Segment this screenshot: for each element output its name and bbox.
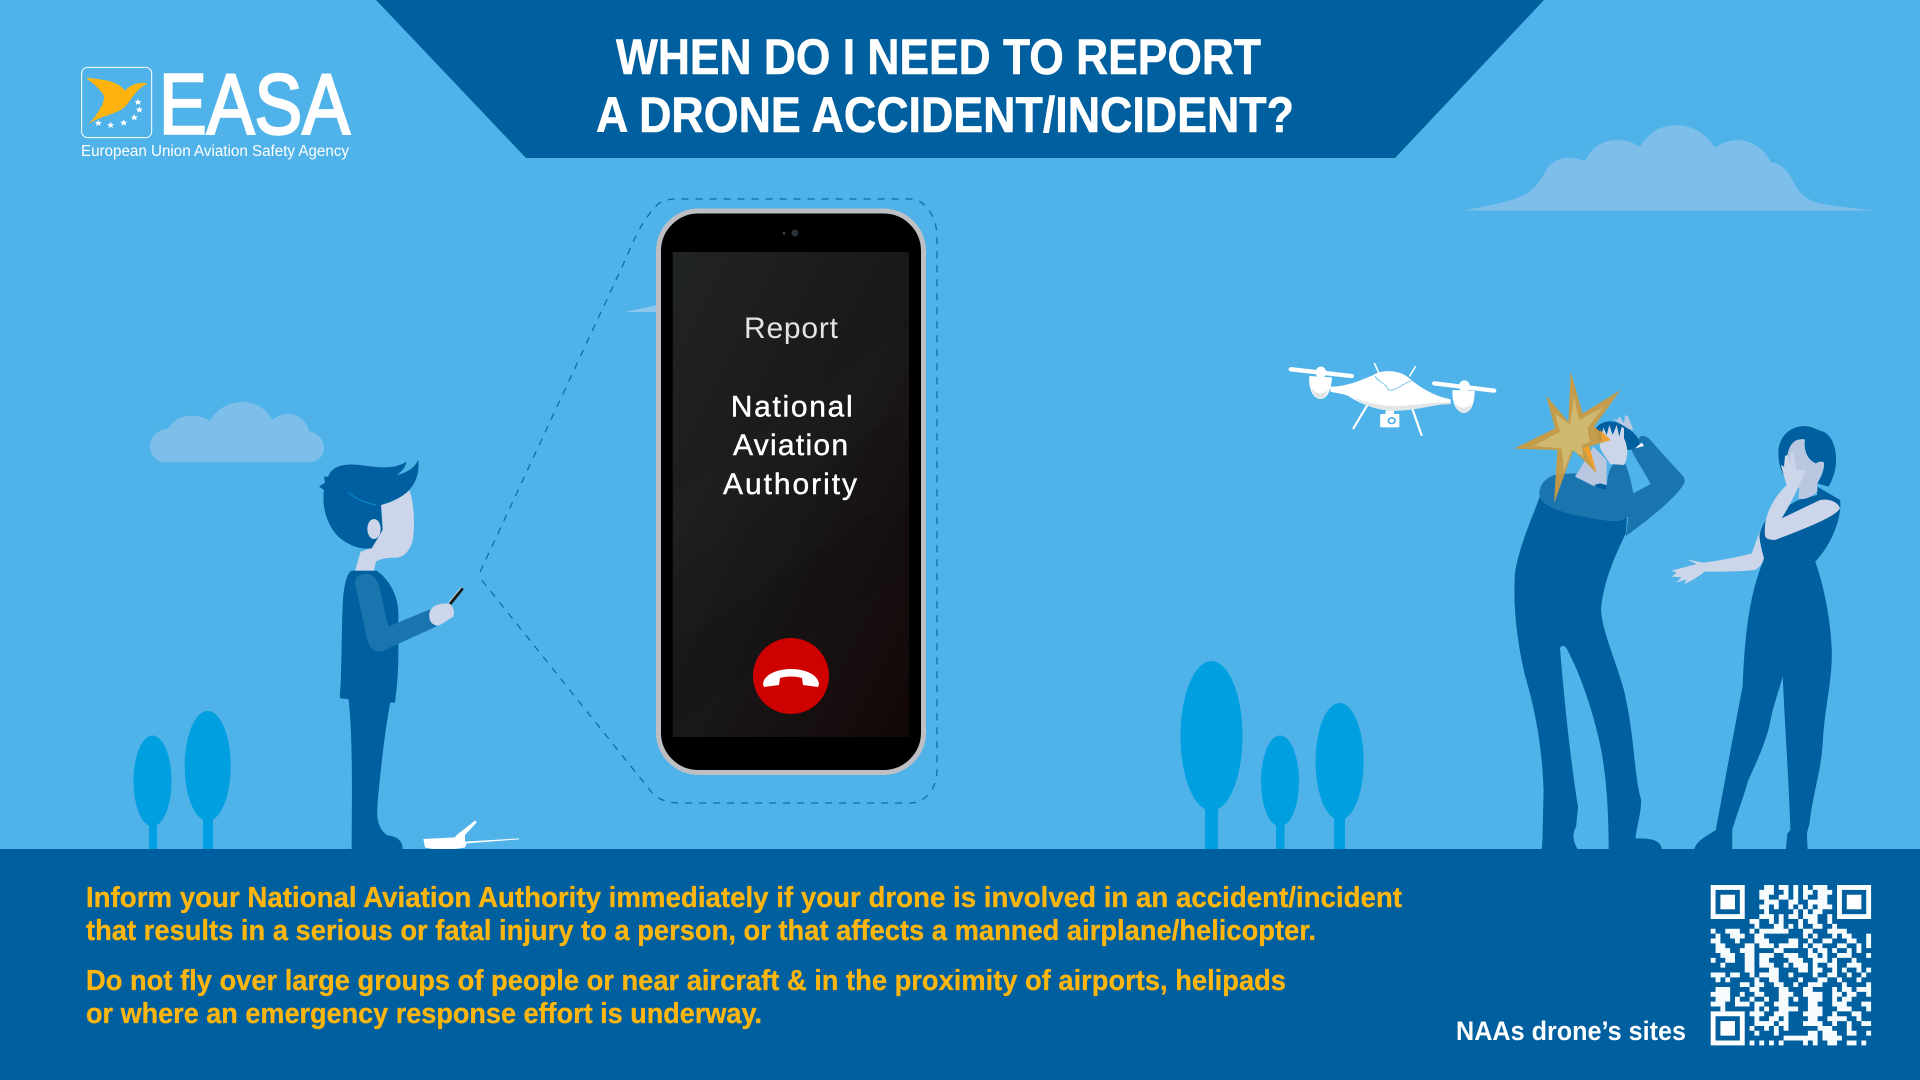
impact starburst: [1514, 372, 1621, 503]
man upper body and head: [1539, 415, 1685, 536]
phone screen: [673, 252, 909, 737]
reporting instruction: that results in a serious or fatal injury to a person, or that affects a manned airplane/helicopter.: [86, 915, 1316, 947]
title: [596, 29, 1294, 143]
flying drone: [1291, 363, 1494, 435]
phone: [625, 211, 924, 772]
header banner with title: [376, 0, 1544, 158]
icon: bird emblem: [82, 67, 152, 138]
drone arms and legs: [1291, 363, 1494, 435]
national aviation authority label: National: [731, 390, 853, 424]
drone body: [1330, 371, 1451, 411]
crashed drone on ground: [423, 821, 519, 849]
red hang up button: [753, 638, 829, 714]
title: A DRONE ACCIDENT/INCIDENT?: [596, 87, 1294, 143]
trees right: [1180, 661, 1364, 850]
QR label: NAAs drone’s sites: [1456, 1016, 1686, 1046]
title: WHEN DO I NEED TO REPORT: [616, 29, 1261, 85]
trees left: [134, 711, 231, 850]
injured man figure: [1514, 415, 1685, 850]
bottom information band: [0, 849, 1920, 1080]
drone pilot figure: [319, 459, 519, 850]
drone motors: [1309, 367, 1475, 413]
dashed callout outline from pilot to phone: [480, 199, 937, 803]
national aviation authority label: Aviation: [733, 429, 848, 462]
pilot hand and phone: [429, 587, 463, 625]
drone camera: [1380, 411, 1399, 427]
man lower body: [1514, 497, 1662, 850]
reporting instruction: [86, 882, 1402, 947]
bystander woman figure: [1672, 426, 1840, 850]
flying restriction: [86, 965, 1286, 1030]
cloud right: [1463, 125, 1875, 211]
cloud left: [150, 402, 324, 462]
report label: Report: [744, 312, 839, 345]
logo wordmark: EASA: [159, 58, 350, 152]
national aviation authority label: [723, 390, 857, 501]
QR code: [1711, 885, 1871, 1045]
reporting instruction: Inform your National Aviation Authority immediately if your drone is involved in an accident/incident: [86, 882, 1402, 914]
woman head and arms: [1672, 426, 1840, 584]
camera: [783, 230, 798, 236]
pilot arm: [355, 574, 436, 652]
pilot legs: [348, 697, 403, 850]
national aviation authority label: Authority: [723, 468, 857, 501]
wedge highlight: [625, 305, 657, 312]
logo tagline: European Union Aviation Safety Agency: [81, 143, 349, 160]
flying restriction: or where an emergency response effort is underway.: [86, 998, 762, 1030]
woman dress: [1694, 487, 1840, 850]
EASA logo: [81, 58, 350, 160]
pilot head: [319, 459, 419, 571]
flying restriction: Do not fly over large groups of people or near aircraft & in the proximity of airports, helipads: [86, 965, 1286, 997]
pilot torso: [340, 571, 398, 703]
